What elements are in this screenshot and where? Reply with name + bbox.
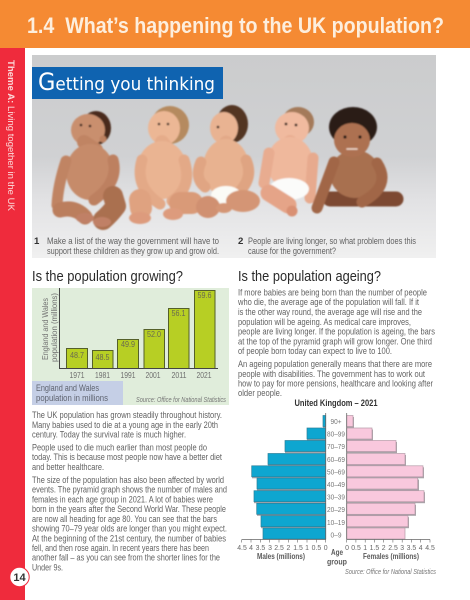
source: Source: Office for National Statistics	[345, 569, 436, 576]
bar chart: England and Wales population: 2011	[172, 371, 187, 380]
male axis ticks: 1	[305, 545, 309, 552]
body text: left column: At the beginning of the 21st century, the number of babies	[32, 533, 226, 544]
body text: right column: older people.	[238, 388, 282, 399]
axes	[242, 413, 430, 540]
baby 2	[129, 106, 192, 224]
heading: is the population growing: Is the population growing?	[32, 268, 183, 285]
body text: left column: century. Today the survival rate is much higher.	[32, 430, 186, 440]
body text: left column	[32, 410, 227, 574]
question 1: 1	[34, 236, 40, 247]
bar chart: England and Wales population: 1981	[95, 371, 110, 380]
body text: left column: events. The pyramid graph shows the number of males and	[32, 485, 227, 496]
bar chart: England and Wales population: 2001	[146, 371, 161, 380]
question 1: support these children as they grow up and grow old.	[47, 246, 219, 257]
banner: getting you thinking: Getting you thinking	[38, 68, 215, 96]
pyramid title: United Kingdom – 2021	[294, 398, 378, 408]
female axis ticks: 0	[345, 545, 349, 552]
female axis ticks: 1	[363, 545, 367, 552]
heading: is the population ageing: Is the population ageing?	[238, 268, 381, 285]
header band	[0, 0, 470, 48]
question 2: People are living longer, so what problem does this	[248, 236, 416, 247]
male axis ticks: 3	[268, 545, 272, 552]
body text: left column: The UK population has grown steadily throughout history.	[32, 410, 222, 421]
axis titles: group	[327, 558, 347, 566]
age group labels: 90+	[330, 417, 342, 426]
bar chart: England and Wales population: 1971	[70, 371, 85, 380]
axis titles	[257, 548, 419, 566]
female axis ticks: 4.5	[425, 545, 435, 552]
female bars	[347, 416, 424, 539]
body text: right column: is the other way round, the average age will rise and the	[238, 307, 422, 318]
bar chart: England and Wales population: 2021	[196, 371, 212, 380]
body text: left column: Many babies used to die at a young age in the early 20th	[32, 420, 218, 431]
bar chart: England and Wales population: 59.6	[198, 291, 212, 300]
body text: right column: population will be ageing. As medical care improves,	[238, 317, 411, 328]
age group labels: 30–39	[327, 492, 345, 502]
age group labels: 10–19	[327, 518, 345, 527]
body text: left column: today. This is because most people now have a better diet	[32, 452, 222, 463]
bar chart: England and Wales population: 48.5	[96, 353, 110, 362]
age group labels: 70–79	[327, 442, 345, 451]
female axis ticks: 2.5	[388, 545, 398, 552]
question 2	[238, 236, 416, 257]
bar shadows	[252, 417, 425, 528]
female axis ticks: 0.5	[351, 545, 361, 552]
body text: left column: showing 70–79 year olds are longer than you might expect.	[32, 524, 227, 535]
axis titles: Age	[331, 548, 343, 557]
body text: left column: The size of the population has also been affected by world	[32, 475, 224, 486]
question 2: cause for the government?	[248, 246, 336, 257]
baby 3	[196, 105, 260, 218]
male axis ticks: 4	[249, 545, 253, 552]
y axis label: England and Wales	[41, 298, 50, 360]
side strip with theme label	[0, 48, 25, 600]
male axis ticks	[237, 545, 328, 552]
bar chart: England and Wales population	[32, 288, 229, 405]
body text: right column: who die, the average age of the population will fall. If it	[237, 297, 419, 308]
age group labels: 0–9	[330, 530, 342, 540]
baby 4	[264, 107, 314, 216]
body text: right column	[237, 288, 435, 399]
chart caption	[32, 381, 123, 405]
bar chart: England and Wales population: 56.1	[172, 309, 186, 318]
female axis ticks: 4	[419, 545, 423, 552]
question 1: Make a list of the way the government will have to	[47, 236, 219, 247]
body text: left column: are now all heading for age 80. You can see that the bars	[32, 514, 217, 525]
female axis ticks: 3.5	[407, 545, 416, 552]
photo panel: five babies	[32, 55, 436, 258]
age group labels: 40–49	[327, 480, 345, 489]
question 1	[34, 236, 219, 257]
body text: right column: of people born today can expect to live to 100.	[238, 346, 392, 357]
body text: left column: Under 9s.	[32, 563, 63, 574]
body text: left column: another fall – as you can see from the shorter lines for the	[32, 553, 220, 564]
age group labels: 50–69	[327, 468, 345, 476]
male axis ticks: 2.5	[274, 545, 284, 552]
male axis ticks: 2	[286, 545, 290, 552]
age group labels: 80–99	[327, 430, 345, 438]
chart caption: England and Wales	[36, 383, 99, 393]
male bars	[252, 416, 326, 539]
female axis ticks: 1.5	[370, 545, 379, 552]
side strip with theme label: Theme A: Living together in the UK	[5, 60, 16, 212]
body text: left column: fell, and then rose again. In recent years there has been	[32, 543, 209, 554]
bar chart: England and Wales population: 49.9	[121, 340, 135, 349]
population pyramid chart	[237, 398, 436, 576]
baby 1	[57, 111, 116, 227]
male axis ticks: 1.5	[293, 545, 303, 552]
body text: left column: and better healthcare.	[32, 462, 104, 473]
body text: left column: People used to die much earlier than most people do	[32, 442, 207, 454]
bar chart: England and Wales population: 52.0	[147, 330, 161, 339]
male axis ticks: 0.5	[312, 545, 321, 552]
chart caption: population in millions	[36, 393, 109, 403]
y axis label	[41, 293, 59, 362]
axis titles: Females (millions)	[363, 552, 419, 561]
body text: right column: people with disabilities. The government has to work out	[238, 369, 425, 380]
age group labels	[327, 417, 345, 540]
age group labels: 60–69	[327, 455, 345, 464]
axis titles: Males (millions)	[257, 552, 305, 561]
bar chart: England and Wales population: 48.7	[70, 351, 84, 360]
male axis ticks: 0	[324, 545, 328, 552]
y axis label: population (millions)	[50, 293, 59, 362]
question 2: 2	[238, 236, 243, 247]
body text: left column: females in each age group in 2021. A lot of babies were	[32, 494, 213, 505]
page number	[10, 567, 29, 587]
female axis ticks: 3	[400, 545, 404, 552]
male axis ticks: 3.5	[256, 545, 265, 552]
source: Source: Office for National Statistics	[136, 397, 226, 404]
female axis ticks	[345, 545, 435, 552]
baby 5	[317, 107, 396, 208]
male axis ticks: 4.5	[237, 545, 247, 552]
age group labels: 20–29	[327, 505, 345, 514]
page number: 14	[13, 572, 26, 584]
bar chart: England and Wales population: 1991	[120, 371, 136, 380]
female axis ticks: 2	[382, 545, 386, 552]
body text: left column: born in the years after the Second World War. These people	[32, 504, 226, 515]
